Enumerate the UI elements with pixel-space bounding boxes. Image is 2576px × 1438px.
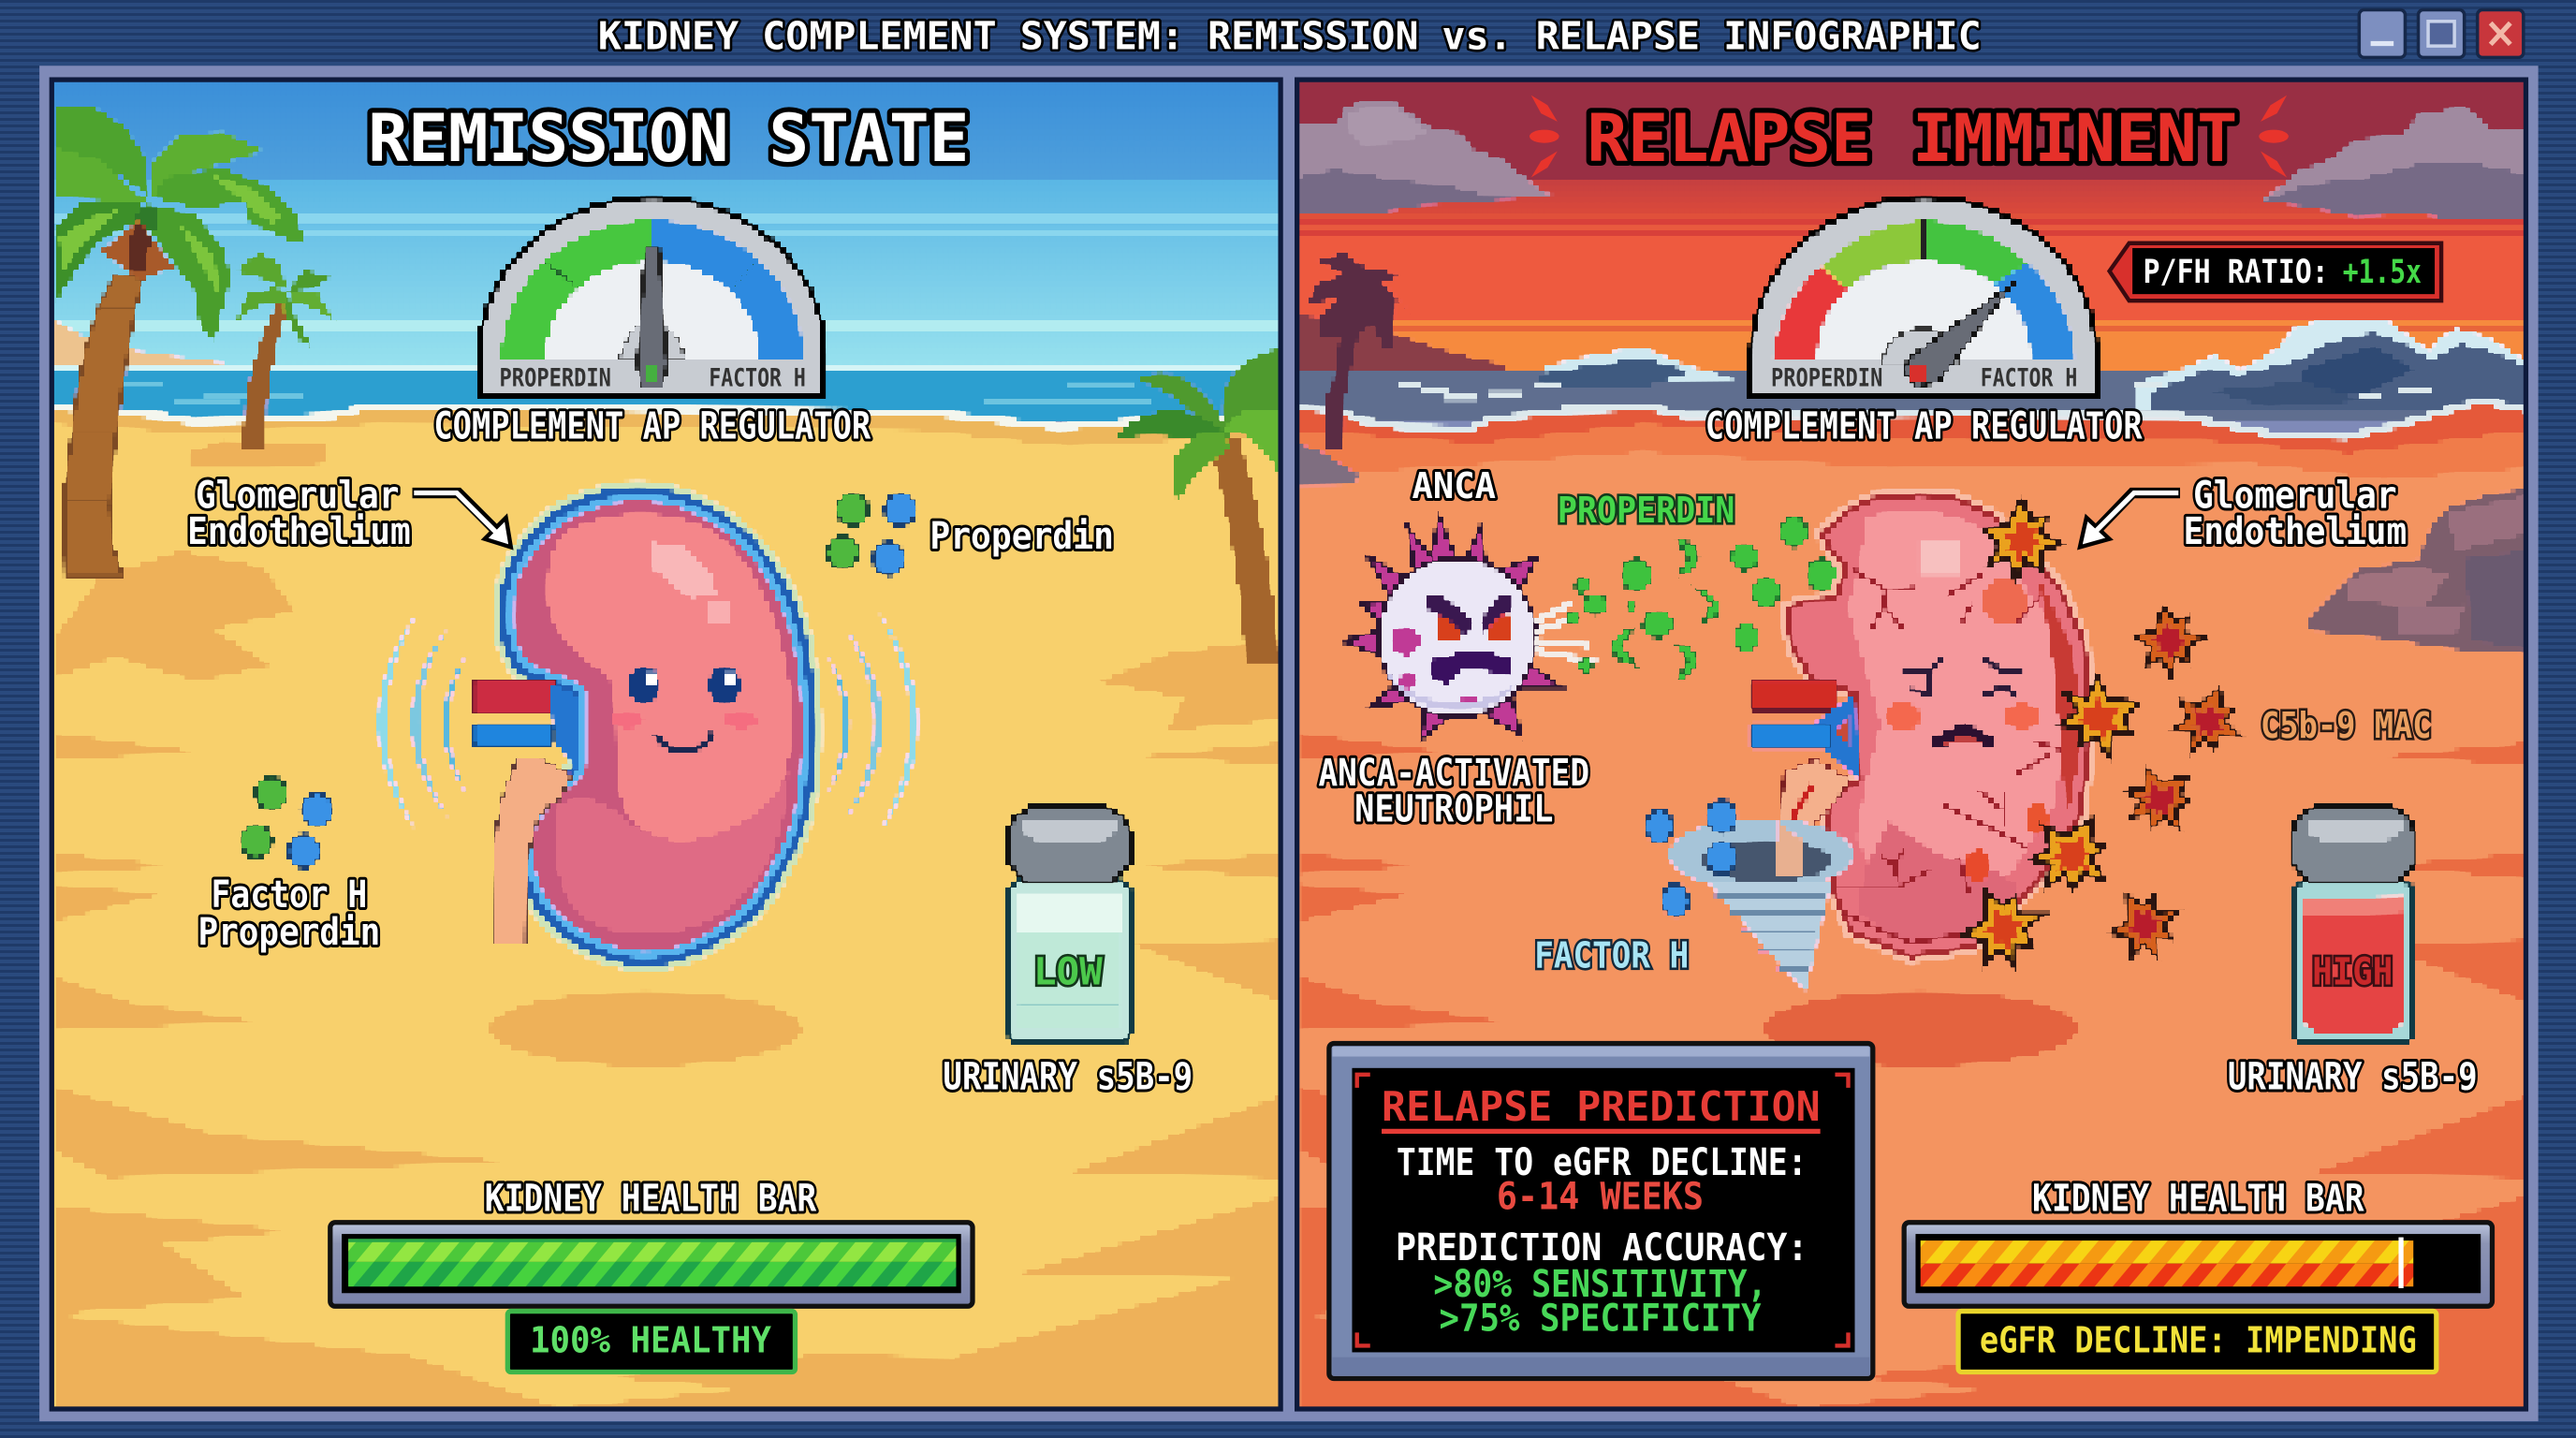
gauge labels: FACTOR H: [709, 364, 806, 392]
label: glomerular endothelium: [2184, 473, 2407, 553]
MAC splat on kidney right: [2052, 670, 2147, 766]
arrow to damaged kidney: [2080, 493, 2180, 547]
gauge labels: [500, 364, 806, 392]
tornado: [1669, 818, 1853, 990]
gauge: complement AP regulator (remission): [479, 198, 825, 396]
label: properdin: Properdin: [929, 514, 1114, 558]
kidney: healthy: [473, 493, 811, 960]
MAC splat on kidney top: [1975, 493, 2070, 588]
time to decline: TIME TO eGFR DECLINE:: [1397, 1140, 1808, 1184]
neutrophil: [1342, 516, 1597, 740]
P/FH ratio callout: [2110, 243, 2441, 301]
label: factor H properdin: Properdin: [198, 910, 380, 954]
label: glomerular endothelium: Glomerular: [2193, 473, 2397, 517]
rock right: [2306, 490, 2525, 654]
panel: relapse prediction: [1329, 1043, 1873, 1379]
label: ANCA: ANCA: [1412, 465, 1496, 507]
label: kidney health bar: KIDNEY HEALTH BAR: [485, 1177, 817, 1221]
rock lower left: [1298, 444, 1358, 487]
sand patches: [54, 733, 1280, 1408]
heading: remission state: REMISSION STATE: [368, 100, 970, 177]
factor H dots: [1647, 800, 1736, 917]
gauge labels: PROPERDIN: [500, 364, 611, 392]
prediction accuracy: PREDICTION ACCURACY:: [1396, 1225, 1808, 1269]
P/FH ratio callout: P/FH RATIO:: [2144, 253, 2329, 291]
panel: relapse imminent: [1298, 81, 2525, 1408]
label: glomerular endothelium: Endothelium: [2184, 509, 2407, 553]
gauge labels: PROPERDIN: [1771, 364, 1882, 392]
label: glomerular endothelium: Glomerular: [196, 473, 399, 517]
palm 1 trunk and fronds: [54, 109, 305, 577]
molecules: factor H dots: [241, 777, 332, 868]
sea: [1298, 370, 2525, 419]
prediction heading: RELAPSE PREDICTION: [1382, 1083, 1821, 1131]
label: factor H properdin: Factor H: [212, 873, 367, 917]
sand: [1298, 398, 2525, 1408]
gauge caption: COMPLEMENT AP REGULATOR: [433, 404, 871, 448]
label: ANCA-activated neutrophil: ANCA-ACTIVATED: [1318, 751, 1589, 795]
clouds: [1298, 102, 2525, 220]
badge: 100% healthy: 100% HEALTHY: [530, 1319, 772, 1361]
badge: eGFR decline impending: [1958, 1312, 2437, 1372]
palm 3 trunk and fronds: [1112, 348, 1280, 666]
label: glomerular endothelium: [187, 473, 411, 553]
label: ANCA-activated neutrophil: [1318, 751, 1589, 831]
title bar heading: KIDNEY COMPLEMENT SYSTEM: REMISSION vs. RELAPSE INFOGRAPHIC: [598, 14, 1982, 59]
label: factor H: FACTOR H: [1534, 935, 1689, 977]
P/FH ratio callout: +1.5x: [2343, 253, 2422, 291]
vial label high: HIGH: [2312, 949, 2393, 993]
sand: [54, 404, 1224, 433]
label: factor H properdin: [198, 873, 380, 954]
label: urinary s5b-9: URINARY s5B-9: [2228, 1055, 2478, 1099]
alarm marks right: [2259, 95, 2289, 178]
molecules: properdin dots: [827, 493, 915, 575]
red sky: [1298, 81, 2525, 183]
heading rule: [1382, 1129, 1821, 1134]
stormy scene art: [1298, 81, 2525, 1408]
health bar: depleted: [1904, 1223, 2492, 1306]
distant dune: [52, 318, 225, 368]
properdin fragments: [1567, 518, 1837, 681]
palm shadows: [57, 550, 296, 682]
arrow to kidney: [413, 493, 511, 547]
silhouette palm: [1308, 253, 1414, 450]
urine vial: high: [2291, 807, 2415, 1043]
sky: [52, 81, 1280, 183]
sand patches: [1299, 733, 2525, 1408]
prediction accuracy: >80% SENSITIVITY,: [1433, 1262, 1767, 1306]
badge: 100% healthy: [507, 1312, 795, 1372]
time to decline: [1397, 1140, 1808, 1219]
alarm marks left: [1530, 95, 1559, 178]
label: kidney health bar: KIDNEY HEALTH BAR: [2032, 1177, 2364, 1221]
palm 2 trunk and fronds: [237, 252, 337, 448]
badge: eGFR decline impending: eGFR DECLINE: IMPENDING: [1980, 1319, 2417, 1361]
health bar: full: [330, 1223, 973, 1306]
waves: [1399, 318, 2525, 411]
label: properdin green: PROPERDIN: [1558, 490, 1734, 532]
MAC splat on kidney lower: [2013, 799, 2130, 914]
sea: [52, 370, 1280, 422]
MAC splat on kidney bottom: [1954, 878, 2055, 978]
time to decline: 6-14 WEEKS: [1497, 1175, 1704, 1219]
prediction accuracy: [1396, 1225, 1808, 1341]
heading: relapse imminent: RELAPSE IMMINENT: [1587, 100, 2237, 177]
vial label low: LOW: [1033, 949, 1103, 993]
motion arcs: [378, 613, 918, 833]
gauge: complement AP regulator (relapse): [1751, 198, 2097, 396]
gauge caption: COMPLEMENT AP REGULATOR: [1705, 404, 2143, 448]
label: ANCA-activated neutrophil: NEUTROPHIL: [1354, 787, 1553, 831]
kidney ground shadow: [1763, 990, 2078, 1066]
gauge labels: FACTOR H: [1981, 364, 2077, 392]
gauge labels: [1771, 364, 2077, 392]
beach scene art: [52, 81, 1280, 1408]
window buttons: [2359, 10, 2524, 57]
label: glomerular endothelium: Endothelium: [187, 509, 411, 553]
urine vial: low: [1007, 807, 1131, 1043]
label: C5b-9 MAC: C5b-9 MAC: [2261, 705, 2432, 747]
free MAC splats: [2100, 606, 2256, 970]
dark hill: [1298, 315, 1505, 372]
panel: remission state: [52, 81, 1280, 1408]
label: urinary s5b-9: URINARY s5B-9: [943, 1055, 1193, 1099]
kidney ground shadow: [490, 990, 801, 1066]
prediction accuracy: >75% SPECIFICITY: [1439, 1297, 1762, 1341]
kidney: damaged: [1751, 494, 2091, 956]
